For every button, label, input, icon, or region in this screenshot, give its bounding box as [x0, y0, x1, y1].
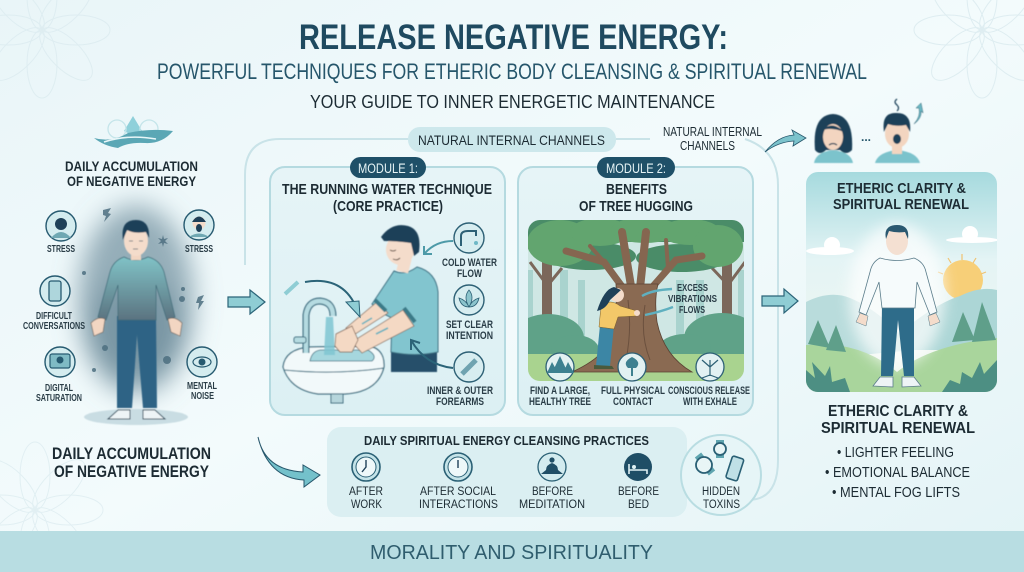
label: before meditation: BEFORE [532, 484, 573, 498]
label: conscious release with exhale: CONSCIOUS RELEASE [668, 385, 750, 397]
list: benefits: • LIGHTER FEELING [837, 444, 954, 461]
label: set clear intention [446, 319, 493, 342]
label: difficult conversations: CONVERSATIONS [23, 321, 85, 332]
icon: bed [624, 453, 652, 481]
heading: tree hugging: BENEFITS [606, 181, 667, 198]
label: find a large healthy tree: HEALTHY TREE [529, 396, 591, 408]
heading: etheric clarity in panel [833, 181, 969, 213]
label: full physical contact [601, 385, 665, 408]
icon: physical contact [618, 353, 646, 381]
heading: tree hugging: OF TREE HUGGING [579, 198, 693, 215]
heading: daily accumulation bottom: OF NEGATIVE ENERGY [54, 462, 210, 481]
heading: running water: (CORE PRACTICE) [333, 198, 443, 215]
label: before bed: BEFORE [618, 484, 659, 498]
label: cold water flow [442, 257, 497, 280]
heading: etheric clarity below: SPIRITUAL RENEWAL [821, 420, 975, 437]
label: excess vibrations flows: FLOWS [679, 305, 705, 316]
icon: clock after work [352, 453, 380, 481]
sun [943, 260, 983, 300]
list: benefits: • EMOTIONAL BALANCE [825, 464, 970, 481]
label: after social interactions [419, 484, 498, 511]
label: hidden toxins [702, 486, 740, 511]
label: stress left: STRESS [47, 244, 75, 255]
arrow: curved to daily practices [258, 437, 320, 487]
heading: daily accumulation top: OF NEGATIVE ENERGY [67, 173, 197, 189]
arrow: to forearms [411, 340, 453, 368]
pill: natural internal channels: NATURAL INTERNAL CHANNELS [418, 132, 605, 148]
heading: running water [282, 181, 492, 215]
footer text: MORALITY AND SPIRITUALITY [370, 542, 653, 564]
main title: RELEASE NEGATIVE ENERGY: [299, 18, 728, 57]
label: difficult conversations [23, 311, 85, 332]
heading: etheric clarity below: ETHERIC CLARITY & [828, 403, 968, 420]
badge: module 1: MODULE 1: [358, 161, 418, 176]
label: inner and outer forearms: FOREARMS [436, 396, 484, 408]
label: cold water flow: COLD WATER [442, 257, 497, 269]
title block [157, 18, 867, 112]
list: benefits: • MENTAL FOG LIFTS [832, 484, 960, 501]
panel: module 1 [270, 157, 505, 415]
label: after social interactions: INTERACTIONS [419, 497, 498, 511]
icon: watches and phone [696, 440, 744, 481]
label: mental noise: MENTAL [187, 381, 217, 392]
heading: running water: THE RUNNING WATER TECHNIQUE [282, 181, 492, 198]
pill: natural internal channels [408, 127, 616, 152]
label: before bed [618, 484, 659, 511]
label: after social interactions: AFTER SOCIAL [420, 484, 496, 498]
heading: daily accumulation bottom: DAILY ACCUMULATION [52, 444, 211, 463]
icon: large tree [546, 353, 574, 381]
icon: phone [40, 276, 70, 306]
flow outline [245, 139, 778, 500]
illustration: man washing forearms [335, 225, 438, 372]
badge: module 1 [350, 157, 426, 178]
label: mental noise [187, 381, 217, 402]
list: benefits [825, 444, 970, 501]
label: conscious release with exhale [668, 385, 750, 408]
tagline: YOUR GUIDE TO INNER ENERGETIC MAINTENANCE [310, 91, 715, 112]
icon: woman distressed [814, 114, 853, 163]
panel: daily practices [327, 427, 687, 517]
heading: tree hugging [579, 181, 693, 215]
heading: etheric clarity below [821, 403, 975, 437]
label: cold water flow: FLOW [457, 268, 482, 280]
arrow: modules to result [762, 289, 798, 313]
figure: stressed person [84, 220, 188, 425]
label: digital saturation: SATURATION [36, 393, 82, 404]
label: stress right: STRESS [185, 244, 213, 255]
badge: module 2 [597, 157, 675, 178]
icon: meditation [538, 453, 566, 481]
icon: conscious release [696, 353, 724, 381]
label: digital saturation: DIGITAL [45, 383, 73, 394]
label: find a large healthy tree [529, 385, 591, 408]
aura motifs [82, 208, 204, 372]
callout: hidden toxins [681, 435, 761, 515]
heading: daily practices: DAILY SPIRITUAL ENERGY CLEANSING PRACTICES [364, 434, 649, 448]
icon: forearms [454, 352, 484, 382]
icon: lotus intention [454, 285, 484, 315]
clouds [806, 226, 998, 255]
label: natural internal channels side: CHANNELS [680, 139, 735, 153]
dark aura [78, 205, 194, 395]
arrow: curved over sink [285, 281, 360, 317]
glowing figure [849, 223, 945, 387]
heading: etheric clarity in panel: SPIRITUAL RENEWAL [833, 197, 969, 213]
left column: negative energy [23, 116, 217, 481]
label: after work: AFTER [349, 484, 383, 498]
illustration: sink [283, 301, 384, 403]
heading: daily accumulation top: DAILY ACCUMULATION [65, 158, 198, 174]
label: before meditation [519, 484, 585, 511]
label: set clear intention: INTENTION [446, 330, 493, 342]
label: after work: WORK [351, 497, 382, 511]
label: inner and outer forearms [427, 385, 493, 408]
label: excess vibrations flows: EXCESS [677, 283, 708, 294]
icon: man exhaling [875, 99, 923, 163]
label: full physical contact: FULL PHYSICAL [601, 385, 665, 397]
panel: module 2 [512, 157, 760, 415]
label: full physical contact: CONTACT [613, 396, 653, 408]
label: hidden toxins: TOXINS [703, 499, 740, 511]
girl hugging tree [594, 287, 640, 369]
arrow: left to modules [228, 290, 265, 314]
label: before bed: BED [628, 497, 649, 511]
heading: etheric clarity in panel: ETHERIC CLARITY & [837, 181, 966, 197]
icon: stress head [46, 211, 76, 241]
icon: water lotus logo [94, 116, 173, 148]
label: difficult conversations: DIFFICULT [36, 311, 72, 322]
heading: daily accumulation top [65, 158, 198, 189]
footer band [0, 531, 1024, 572]
label: natural internal channels side [663, 125, 762, 153]
illustration: tree scene [528, 220, 744, 381]
label: find a large healthy tree: FIND A LARGE, [530, 385, 590, 397]
label: digital saturation [36, 383, 82, 404]
heading: daily accumulation bottom [52, 444, 211, 481]
label: before meditation: MEDITATION [519, 497, 585, 511]
icon: cold water [454, 223, 484, 253]
label: set clear intention: SET CLEAR [446, 319, 493, 331]
label: hidden toxins: HIDDEN [702, 486, 740, 498]
label: inner and outer forearms: INNER & OUTER [427, 385, 493, 397]
badge: module 2: MODULE 2: [606, 161, 666, 176]
label: after work [349, 484, 383, 511]
subtitle: POWERFUL TECHNIQUES FOR ETHERIC BODY CLEANSING & SPIRITUAL RENEWAL [157, 59, 867, 84]
icon: mental noise [187, 347, 217, 377]
panel: etheric clarity illustration [806, 172, 998, 392]
label: conscious release with exhale: WITH EXHALE [683, 396, 737, 408]
label: excess vibrations flows: VIBRATIONS [668, 294, 717, 305]
label: excess vibrations flows [668, 283, 717, 316]
icon: stress shouting [184, 210, 214, 240]
arrow: to cold water [424, 241, 453, 254]
label: natural internal channels side: NATURAL INTERNAL [663, 125, 762, 139]
icon: digital saturation [45, 347, 75, 377]
icon: clock after social [444, 453, 472, 481]
dots between faces: ... [861, 130, 871, 144]
label: mental noise: NOISE [191, 391, 214, 402]
arrow: curved to faces [765, 130, 806, 152]
